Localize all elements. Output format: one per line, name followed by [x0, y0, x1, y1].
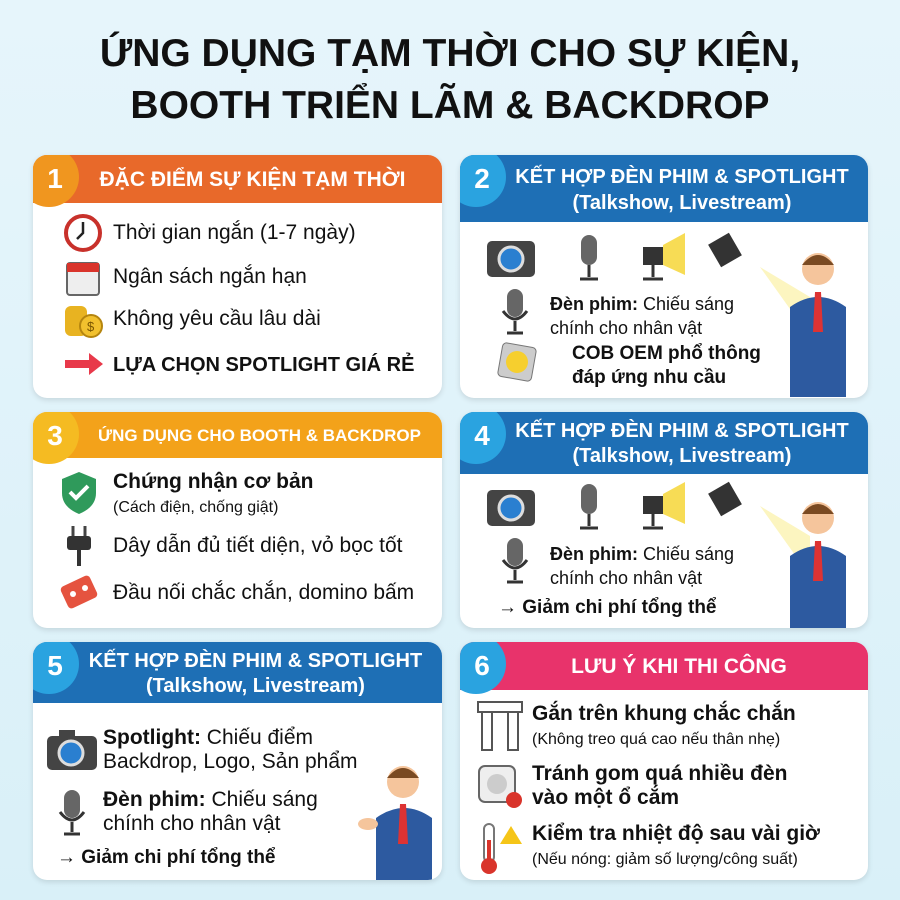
title: BOOTH TRIỂN LÃM & BACKDROP [130, 84, 770, 127]
text: socket: Tránh gom quá nhiều đèn [532, 762, 788, 785]
number 3 [19, 404, 79, 464]
number 1 [19, 147, 79, 207]
number 2 [446, 147, 506, 207]
text: cert: (Cách điện, chống giật) [113, 499, 278, 516]
icon: mic [58, 790, 86, 836]
text: socket [532, 762, 788, 809]
header 1: ĐẶC ĐIỂM SỰ KIỆN TẠM THỜI [100, 168, 406, 191]
icon: coins: $ [87, 319, 95, 334]
text: reduce cost: → Giảm chi phí tổng thể [498, 597, 716, 618]
number 1: 1 [47, 163, 63, 194]
number 4: 4 [474, 420, 490, 451]
icon: camera [47, 730, 97, 770]
presenter [760, 502, 846, 628]
header 4: (Talkshow, Livestream) [573, 445, 791, 467]
header 2: KẾT HỢP ĐÈN PHIM & SPOTLIGHT [515, 166, 849, 188]
icon: truss [477, 701, 523, 751]
panel: 3 [33, 412, 442, 628]
text: wire: Dây dẫn đủ tiết diện, vỏ bọc tốt [113, 534, 403, 557]
header 5: (Talkshow, Livestream) [146, 675, 365, 697]
text: COB [572, 343, 761, 388]
icon: coins [65, 306, 103, 338]
number 6: 6 [474, 650, 490, 681]
icon: arrow [65, 353, 103, 375]
icons row [487, 482, 742, 530]
text: film light: chính cho nhân vật [550, 568, 702, 588]
text: reduce cost: → Giảm chi phí tổng thể [57, 847, 276, 868]
icon: shield [62, 472, 96, 514]
text: choice: LỰA CHỌN SPOTLIGHT GIÁ RẺ [113, 354, 414, 376]
text: temperature [532, 822, 820, 868]
text: film light [103, 788, 318, 835]
text: film light: Đèn phim: Chiếu sáng [550, 294, 734, 314]
presenter [760, 253, 846, 397]
text: budget: Ngân sách ngắn hạn [113, 265, 307, 288]
text: not long-term: Không yêu cầu lâu dài [113, 307, 321, 330]
panel: 2 [460, 155, 868, 398]
panel: 6 [460, 642, 868, 880]
panel: 5 [33, 642, 442, 880]
text: film light: chính cho nhân vật [103, 812, 280, 835]
icons row [487, 232, 742, 280]
header 2 [460, 155, 868, 222]
text: film light [550, 294, 734, 338]
text: short time: Thời gian ngắn (1-7 ngày) [113, 221, 356, 244]
title [100, 31, 800, 127]
text: mount: Gắn trên khung chắc chắn [532, 702, 796, 725]
header 1 [33, 155, 442, 203]
panel: 4 [460, 412, 868, 628]
text: film light: Đèn phim: Chiếu sáng [550, 544, 734, 564]
header 5: KẾT HỢP ĐÈN PHIM & SPOTLIGHT [89, 650, 422, 672]
text: mount: (Không treo quá cao nếu thân nhẹ) [532, 731, 780, 748]
icon: thermometer [481, 823, 522, 874]
text: cert [113, 470, 313, 516]
header 4 [460, 412, 868, 474]
icon: plug [67, 526, 91, 566]
title: ỨNG DỤNG TẠM THỜI CHO SỰ KIỆN, [100, 32, 800, 75]
text: socket: vào một ổ cắm [532, 786, 679, 809]
text: film light: chính cho nhân vật [550, 318, 702, 338]
number 3: 3 [47, 420, 63, 451]
text: connector: Đầu nối chắc chắn, domino bấm [113, 581, 414, 604]
text: film light: Đèn phim: Chiếu sáng [103, 788, 318, 811]
text: COB: COB OEM phổ thông [572, 343, 761, 364]
text: temperature: (Nếu nóng: giảm số lượng/công suất) [532, 851, 798, 868]
header 2: (Talkshow, Livestream) [573, 192, 791, 214]
number 6 [446, 634, 506, 694]
icon: COB [497, 342, 537, 382]
header 3 [33, 412, 442, 458]
icon: mic [502, 538, 528, 584]
header 4: KẾT HỢP ĐÈN PHIM & SPOTLIGHT [515, 420, 849, 442]
header 3: ỨNG DỤNG CHO BOOTH & BACKDROP [98, 426, 421, 445]
number 4 [446, 404, 506, 464]
number 2: 2 [474, 163, 490, 194]
icon: socket [478, 765, 522, 808]
icon: domino [60, 576, 98, 608]
text: temperature: Kiểm tra nhiệt độ sau vài giờ [532, 822, 820, 845]
text: mount [532, 700, 796, 748]
number 5 [19, 634, 79, 694]
header 5 [33, 642, 442, 703]
header 6: LƯU Ý KHI THI CÔNG [571, 655, 787, 678]
text: spotlight: Spotlight: Chiếu điểm [103, 726, 313, 749]
icon: calendar [66, 262, 100, 296]
text: COB: đáp ứng nhu cầu [572, 367, 726, 388]
text: cert: Chứng nhận cơ bản [113, 470, 313, 493]
icon: clock [64, 214, 102, 252]
text: film light [550, 544, 734, 588]
icon: mic [502, 289, 528, 334]
header 6 [460, 642, 868, 690]
text: spotlight: Backdrop, Logo, Sản phẩm [103, 750, 358, 773]
presenter [358, 766, 432, 880]
number 5: 5 [47, 650, 63, 681]
panel: 1 characteristics [33, 155, 442, 398]
text: spotlight [103, 726, 358, 773]
